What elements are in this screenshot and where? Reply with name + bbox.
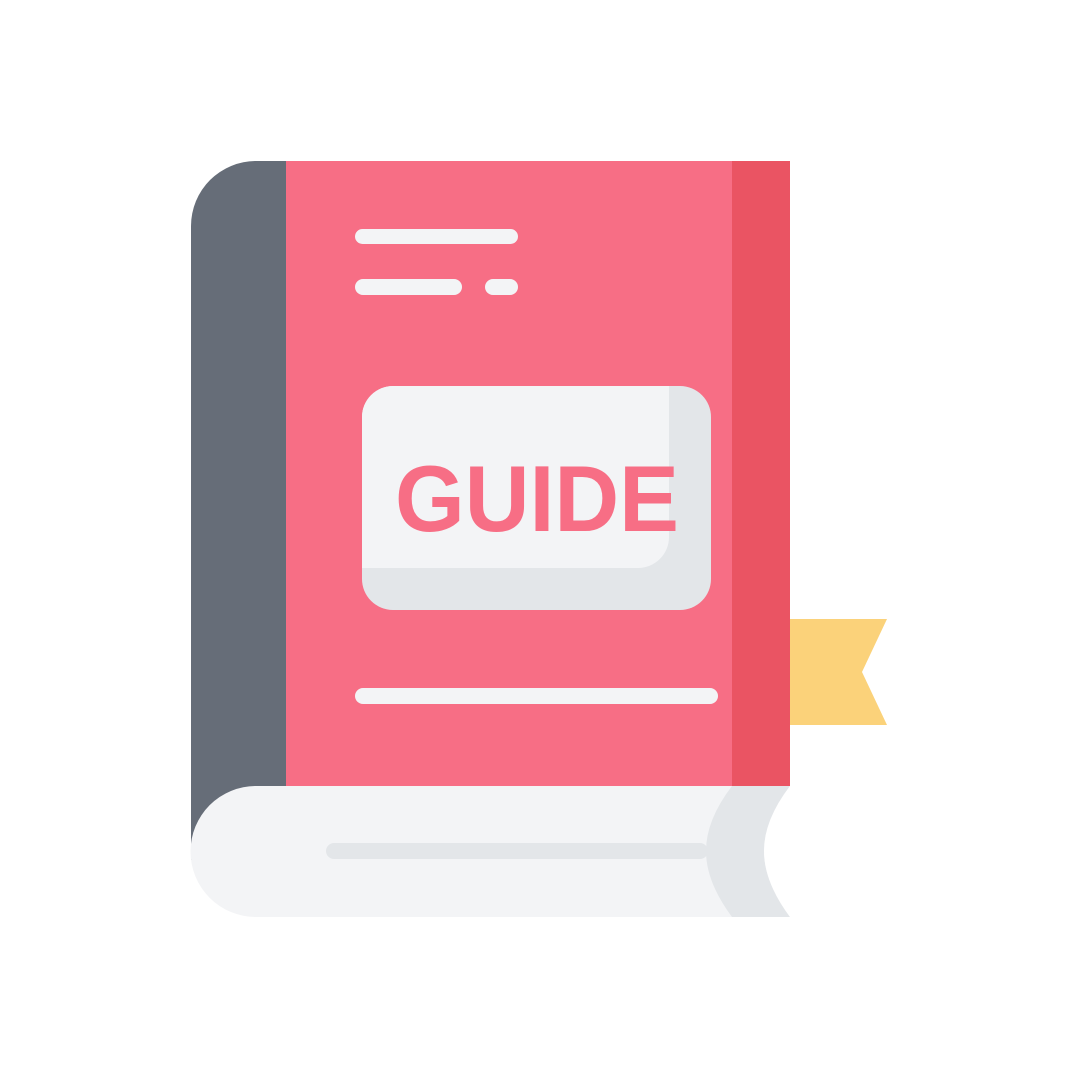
label: GUIDE: GUIDE <box>395 446 679 551</box>
book cover <box>286 161 790 786</box>
icon: bookmark ribbon <box>790 619 887 725</box>
cover text lines <box>355 229 718 704</box>
pages block <box>190 786 800 917</box>
book spine <box>191 161 300 860</box>
label: GUIDE <box>362 386 711 610</box>
